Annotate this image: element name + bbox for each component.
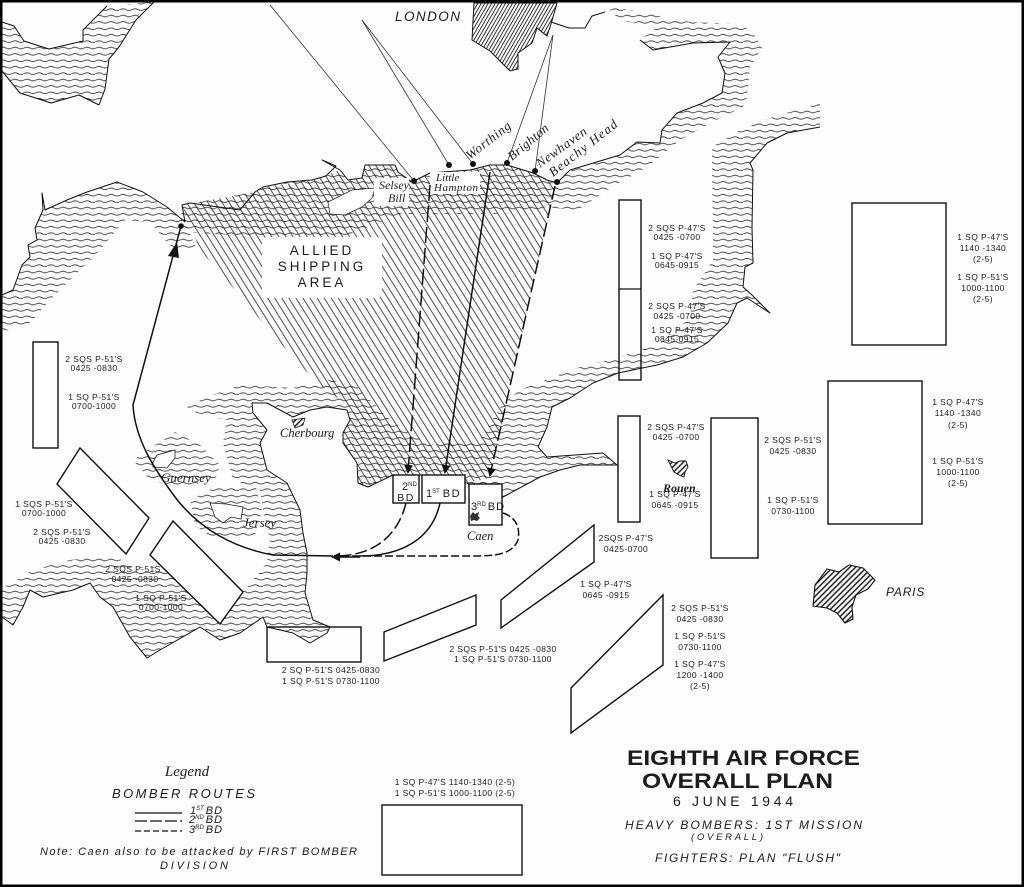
patrol box: far west: 2 SQS P-51'S [65, 354, 123, 364]
patrol box: south east diagonal: 1 SQ P-51'S [674, 631, 726, 641]
patrol box: south east diagonal: 0425 -0830 [676, 614, 724, 624]
legend: DIVISION [160, 860, 228, 872]
city: Cherbourg [292, 418, 305, 428]
patrol box: upper right: (2-5) [973, 254, 993, 264]
coastal place names: Selsey [379, 178, 410, 192]
patrol box: bottom centre: 1 SQ P-51'S 1000-1100 (2-5) [395, 788, 515, 798]
patrol box: central Channel north: 1 SQ P-47'S [651, 251, 703, 261]
legend: RD [195, 825, 204, 831]
legend: Note: Caen also to be attacked by FIRST BOMBER [40, 846, 357, 858]
patrol box: west diagonal upper: 0700-1000 [22, 508, 66, 518]
patrol box: upper right [852, 203, 1009, 345]
patrol box: Seine narrow: 0425 -0700 [652, 432, 700, 442]
patrol box: right middle: (2-5) [948, 478, 968, 488]
patrol box: south east diagonal: 0730-1100 [678, 642, 722, 652]
place names France: Rouen [662, 481, 696, 495]
return routes from targets [133, 226, 519, 557]
bomber routes across the Channel [408, 172, 555, 475]
isle of wight [328, 188, 375, 215]
patrol box: south of Caen diagonal: 0645 -0915 [582, 590, 630, 600]
patrol box: south centre diagonal [384, 595, 557, 664]
label box: allied shipping area: AREA [298, 275, 346, 290]
city: Rouen [668, 460, 688, 477]
label box: allied shipping area: ALLIED [290, 243, 354, 258]
target box: 2nd BD: 2 [402, 481, 408, 493]
legend: 2 [189, 814, 195, 826]
legend: BD [206, 805, 223, 817]
coastal place names: Newhaven [532, 124, 589, 171]
target box: 1st BD: BD [443, 488, 461, 500]
patrol box: south east diagonal: 2 SQS P-51'S [671, 603, 729, 613]
patrol box: right middle: 1 SQ P-47'S [932, 397, 984, 407]
patrol box: south east diagonal [571, 595, 729, 733]
place names France: Jersey [243, 515, 276, 530]
target box: 3rd BD with Caen: 3 [471, 501, 477, 513]
patrol box: west diagonal lower: 1 SQ P-51'S [135, 593, 187, 603]
patrol box: right middle: 1000-1100 [936, 467, 980, 477]
patrol box: Cotentin south: 2 SQ P-51'S 0425-0830 [282, 665, 380, 675]
patrol box: central Channel north: 0645-0915 [655, 260, 699, 270]
patrol box: far west: 0700-1000 [72, 401, 116, 411]
legend: ST [196, 806, 205, 812]
legend [40, 764, 357, 872]
patrol box: central Channel north: 0845-0915 [655, 334, 699, 344]
london area hatched [472, 3, 557, 71]
patrol box: upper right: 1000-1100 [961, 283, 1005, 293]
coastal place names: Brighton [504, 120, 551, 163]
coastal place names: Worthing [463, 118, 514, 162]
patrol box: south east diagonal: 1 SQ P-47'S [674, 659, 726, 669]
patrol box: Seine narrow: 1 SQ P-47'S [649, 489, 701, 499]
patrol box: tall middle: 2 SQS P-51'S [764, 435, 822, 445]
patrol box: central Channel north: 0425 -0700 [653, 232, 701, 242]
allied shipping area hatching [182, 165, 555, 487]
target box: 3rd BD with Caen [467, 484, 505, 543]
islands: Guernsey and Jersey [153, 450, 243, 523]
target box: 3rd BD with Caen: RD [477, 502, 486, 508]
patrol box: south east diagonal: (2-5) [690, 681, 710, 691]
patrol box: west diagonal upper: 2 SQS P-51'S [33, 527, 91, 537]
patrol box: tall middle [711, 418, 822, 558]
patrol box: far west: 1 SQ P-51'S [68, 392, 120, 402]
patrol box: west diagonal lower: 0425 -0830 [111, 574, 159, 584]
target box: 1st BD: ST [432, 489, 440, 495]
target box: 2nd BD [393, 475, 419, 504]
place names France: Cherbourg [280, 426, 334, 440]
label box: allied shipping area [262, 237, 382, 298]
river Thames [551, 12, 605, 28]
label box: allied shipping area: SHIPPING [278, 259, 366, 274]
patrol box: right middle: (2-5) [948, 420, 968, 430]
title block [625, 747, 862, 865]
place names France [161, 426, 925, 599]
patrol box: right middle: 1140 -1340 [935, 408, 981, 418]
patrol box: south centre diagonal: 1 SQ P-51'S 0730-1100 [454, 654, 552, 664]
title block: OVERALL PLAN [642, 770, 833, 793]
patrol box: bottom centre: 1 SQ P-47'S 1140-1340 (2-5) [395, 777, 515, 787]
patrol box: tall middle: 1 SQ P-51'S [767, 495, 819, 505]
patrol box: right middle [828, 381, 984, 524]
patrol box: far west [33, 342, 123, 448]
legend: Legend [164, 764, 210, 780]
patrol box: west diagonal upper: 0425 -0830 [38, 536, 86, 546]
place names France: PARIS [886, 585, 925, 599]
patrol box: central Channel north: 2 SQS P-47'S [648, 223, 706, 233]
patrol box: south centre diagonal: 2 SQS P-51'S 0425 -0830 [449, 644, 557, 654]
patrol box: Seine narrow: 2 SQS P-47'S [647, 422, 705, 432]
coastal place names: Hampton [433, 182, 478, 194]
patrol box: south of Caen diagonal [501, 525, 653, 628]
patrol box: central Channel north: 1 SQ P-47'S [651, 325, 703, 335]
place names France: Guernsey [161, 470, 211, 485]
coastal place names: Beachy Head [546, 116, 621, 179]
coastal place names: Bill [388, 191, 406, 205]
legend: ND [195, 815, 204, 821]
patrol box: west diagonal upper: 1 SQS P-51'S [15, 499, 73, 509]
patrol box: central Channel north: 2 SQS P-47'S [648, 301, 706, 311]
patrol box: west diagonal lower: 2 SQS P-51S [105, 564, 161, 574]
city: Paris [813, 565, 875, 623]
legend: BD [206, 824, 223, 836]
patrol box: Seine narrow: 0645 -0915 [651, 500, 699, 510]
coastal departure points [178, 160, 560, 229]
patrol box: Seine narrow [618, 416, 705, 522]
patrol box: central Channel north [619, 200, 706, 380]
target box: 1st BD: 1 [426, 488, 432, 500]
patrol box: south east diagonal: 1200 -1400 [676, 670, 724, 680]
patrol box: west diagonal upper [15, 448, 149, 554]
water: coastal wave shading [2, 2, 820, 658]
patrol box: Cotentin south: 1 SQ P-51'S 0730-1100 [282, 676, 380, 686]
patrol box: far west: 0425 -0830 [70, 363, 118, 373]
patrol box: upper right: (2-5) [973, 294, 993, 304]
legend: BOMBER ROUTES [112, 786, 255, 801]
legend: 3 [189, 824, 195, 836]
patrol box: south of Caen diagonal: 1 SQ P-47'S [580, 579, 632, 589]
label: London: LONDON [395, 9, 460, 24]
coastal place names: Little [435, 172, 459, 184]
patrol box: upper right: 1140 -1340 [960, 243, 1006, 253]
patrol box: central Channel north: 0425 -0700 [653, 311, 701, 321]
legend: BD [206, 814, 223, 826]
target box: 3rd BD with Caen: BD [488, 501, 505, 513]
patrol box: south of Caen diagonal: 0425-0700 [604, 544, 648, 554]
patrol box: west diagonal lower: 0700-1000 [139, 602, 183, 612]
target box: 2nd BD: ND [408, 482, 417, 488]
title block: EIGHTH AIR FORCE [627, 747, 860, 770]
patrol box: Cotentin south [267, 627, 380, 686]
patrol box: tall middle: 0425 -0830 [769, 446, 817, 456]
patrol box: right middle: 1 SQ P-51'S [932, 456, 984, 466]
target box: 1st BD [422, 475, 465, 503]
patrol box: west diagonal lower [105, 521, 243, 624]
target box: 2nd BD: BD [397, 492, 415, 504]
coastal place names [374, 116, 621, 206]
patrol box: bottom centre [382, 777, 522, 875]
title block: (OVERALL) [691, 832, 763, 843]
patrol box: upper right: 1 SQ P-47'S [957, 232, 1009, 242]
patrol box: upper right: 1 SQ P-51'S [957, 272, 1009, 282]
bomber assembly route lines from England [270, 5, 553, 181]
patrol box: tall middle: 0730-1100 [771, 506, 815, 516]
title block: HEAVY BOMBERS: 1ST MISSION [625, 818, 862, 832]
coastlines [2, 2, 820, 658]
title block: FIGHTERS: PLAN "FLUSH" [655, 851, 841, 865]
title block: 6 JUNE 1944 [673, 793, 793, 809]
patrol box: south of Caen diagonal: 2SQS P-47'S [599, 533, 653, 543]
legend: 1 [190, 805, 196, 817]
target box: 3rd BD with Caen: Caen [467, 529, 493, 543]
